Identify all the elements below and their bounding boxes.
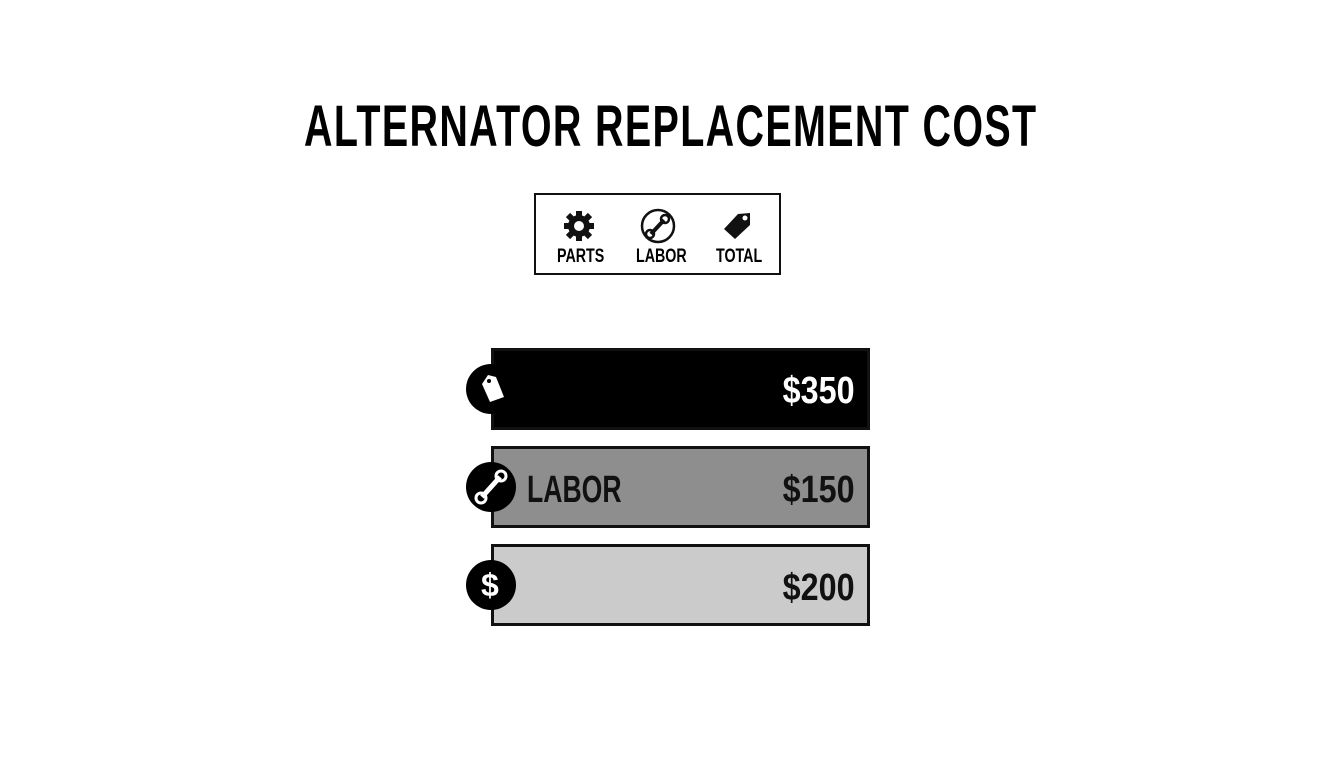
label: labor: LABOR [636, 246, 687, 267]
icon: dollar circle: $ [481, 567, 499, 603]
bar: total [491, 348, 870, 430]
icon: wrench circle [466, 462, 516, 512]
legend [534, 193, 781, 275]
label: labor: LABOR [527, 469, 622, 511]
icon: dollar circle [466, 560, 516, 610]
icon: tag [724, 213, 750, 239]
bar: parts [491, 544, 870, 626]
value: labor: $150 [783, 469, 855, 511]
icon: total tag circle [466, 364, 516, 414]
icon: gear [564, 211, 594, 241]
title: ALTERNATOR REPLACEMENT COST [304, 94, 1037, 159]
icon: wrench circle [640, 208, 676, 244]
label: total: TOTAL [716, 246, 762, 267]
label: parts: PARTS [557, 246, 604, 267]
bar: labor [491, 446, 870, 528]
value: parts: $200 [783, 567, 855, 609]
value: total: $350 [783, 370, 855, 412]
